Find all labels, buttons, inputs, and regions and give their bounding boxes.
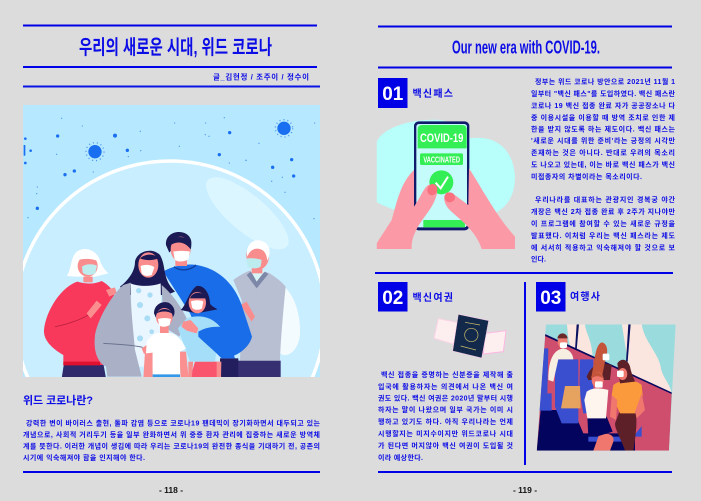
section 01 article: '새로운 시대를 위한 준비'라는 긍정의 시각만 [531,136,676,145]
right hand [444,168,515,249]
son [143,302,189,378]
intro paragraph [23,418,321,462]
section 01 article: 발표했다. 이처럼 우리는 백신 패스라는 제도 [531,231,676,240]
page number 119: - 119 - [513,485,537,495]
intro paragraph: 강력한 변이 바이러스 출현, 돌파 감염 등으로 코로나19 팬데믹이 장기화하면서 대두되고 있는 [26,418,321,428]
section 01 article: 일부터 "백신 패스"를 도입하였다. 백신 패스란 [531,89,676,98]
page number 118: - 118 - [159,485,183,495]
intro paragraph: 시기에 익숙해져야 함을 인지해야 한다. [23,453,145,462]
handbag [561,386,581,408]
father [163,232,252,378]
section 01 article: 정부는 위드 코로나 방안으로 2021년 11월 1 [535,77,675,86]
section 03 label: 여행사 [570,290,600,303]
section 01 article: 우리나라를 대표하는 관광지인 경복궁 야간 [535,195,676,204]
section 02 article: 시행할지는 미지수이지만 위드코로나 시대 [378,429,513,438]
wall [537,335,672,452]
passenger: woman in back [587,342,612,380]
section 02 article: 하자는 말이 나왔으며 일부 국가는 이미 시 [378,405,513,414]
section 01 article: 이 프로그램에 참여할 수 있는 새로운 규정을 [531,219,676,228]
passenger: man in back [548,333,573,382]
section 02 label: 백신여권 [412,291,453,304]
family illustration under a protective dome [23,105,320,377]
grandmother [44,249,117,378]
daughter [178,286,235,378]
phone: COVID-19 [420,132,464,145]
family of six [44,232,300,378]
section 01 article: 중 이용시설을 이용할 때 방역 조치로 인한 제 [531,113,675,122]
passenger: woman with orange top [610,360,645,451]
title: 우리의 새로운 시대, 위드 코로나 [79,36,272,59]
passenger: girl in white top [584,372,614,451]
section 02 badge [378,282,408,312]
section 02 badge: 02 [382,288,403,309]
travellers on a bus illustration [535,323,678,452]
mother [95,251,187,377]
vaccine pass phone illustration [377,120,515,249]
intro paragraph: 계를 뜻한다. 이러한 개념이 생김에 따라 우리는 코로나19의 완전한 종식을 기대하기 전, 공존의 [23,442,320,450]
section 02 article [378,370,514,462]
section 01 article: 개장은 백신 2차 접종 완료 후 2주가 지나야만 [531,207,676,216]
curtains [566,324,592,356]
section 01 label: 백신패스 [412,87,453,100]
section 01 article: 에 서서히 적용하고 익숙해져야 할 것으로 보 [531,243,676,252]
intro paragraph: 개념으로, 사회적 거리두기 등을 일부 완화하면서 위 중증 환자 관리에 집중하는 새로운 방역체 [23,430,320,439]
author credit: 글_김현정 / 조주이 / 정수이 [213,72,309,82]
section 02 article: 이라 예상한다. [378,453,423,462]
section 01 article: 인다. [531,254,546,264]
section 01 article: 코로나 19 백신 접종 완료 자가 공공장소나 다 [531,101,676,110]
section 02 article: 백신 접종을 증명하는 신분증을 제작해 출 [381,370,514,379]
passport and tickets illustration [434,314,506,358]
viruses and particles [24,117,315,261]
section 01 article: 한을 받지 않도록 하는 제도이다. 백신 패스는 [531,124,676,134]
left hand [377,170,437,249]
section 01 badge: 01 [382,84,404,105]
section 02 article: 가 된다면 머지않아 백신 여권이 도입될 것 [378,441,513,450]
grandfather [233,240,300,378]
section 02 article: 입국에 활용하자는 의견에서 나온 백신 여 [378,382,513,391]
section 03 badge: 03 [540,288,561,309]
heading: what is With Corona: 위드 코로나란? [23,393,93,407]
section 01 article: 존재하는 것은 아니다. 반대로 우려의 목소리 [531,148,675,157]
section 01 article: 미접종자의 차별이라는 목소리이다. [531,172,642,181]
section 01 article [531,77,676,264]
phone: VACCINATED [423,155,460,164]
section 02 article: 권도 있다. 백신 여권은 2020년 말부터 시행 [378,394,513,402]
seats [537,410,635,452]
dome [23,159,320,377]
english title: Our new era with COVID-19. [452,38,600,58]
section 02 article: 행하고 있기도 하다. 아직 우리나라는 언제 [378,417,513,426]
section 01 article: 도 나오고 있는데, 이는 바로 백신 패스가 백신 [531,160,675,169]
section 01 badge [378,78,408,108]
background blob [377,120,515,218]
phone [414,121,469,230]
section 03 badge [536,282,566,312]
